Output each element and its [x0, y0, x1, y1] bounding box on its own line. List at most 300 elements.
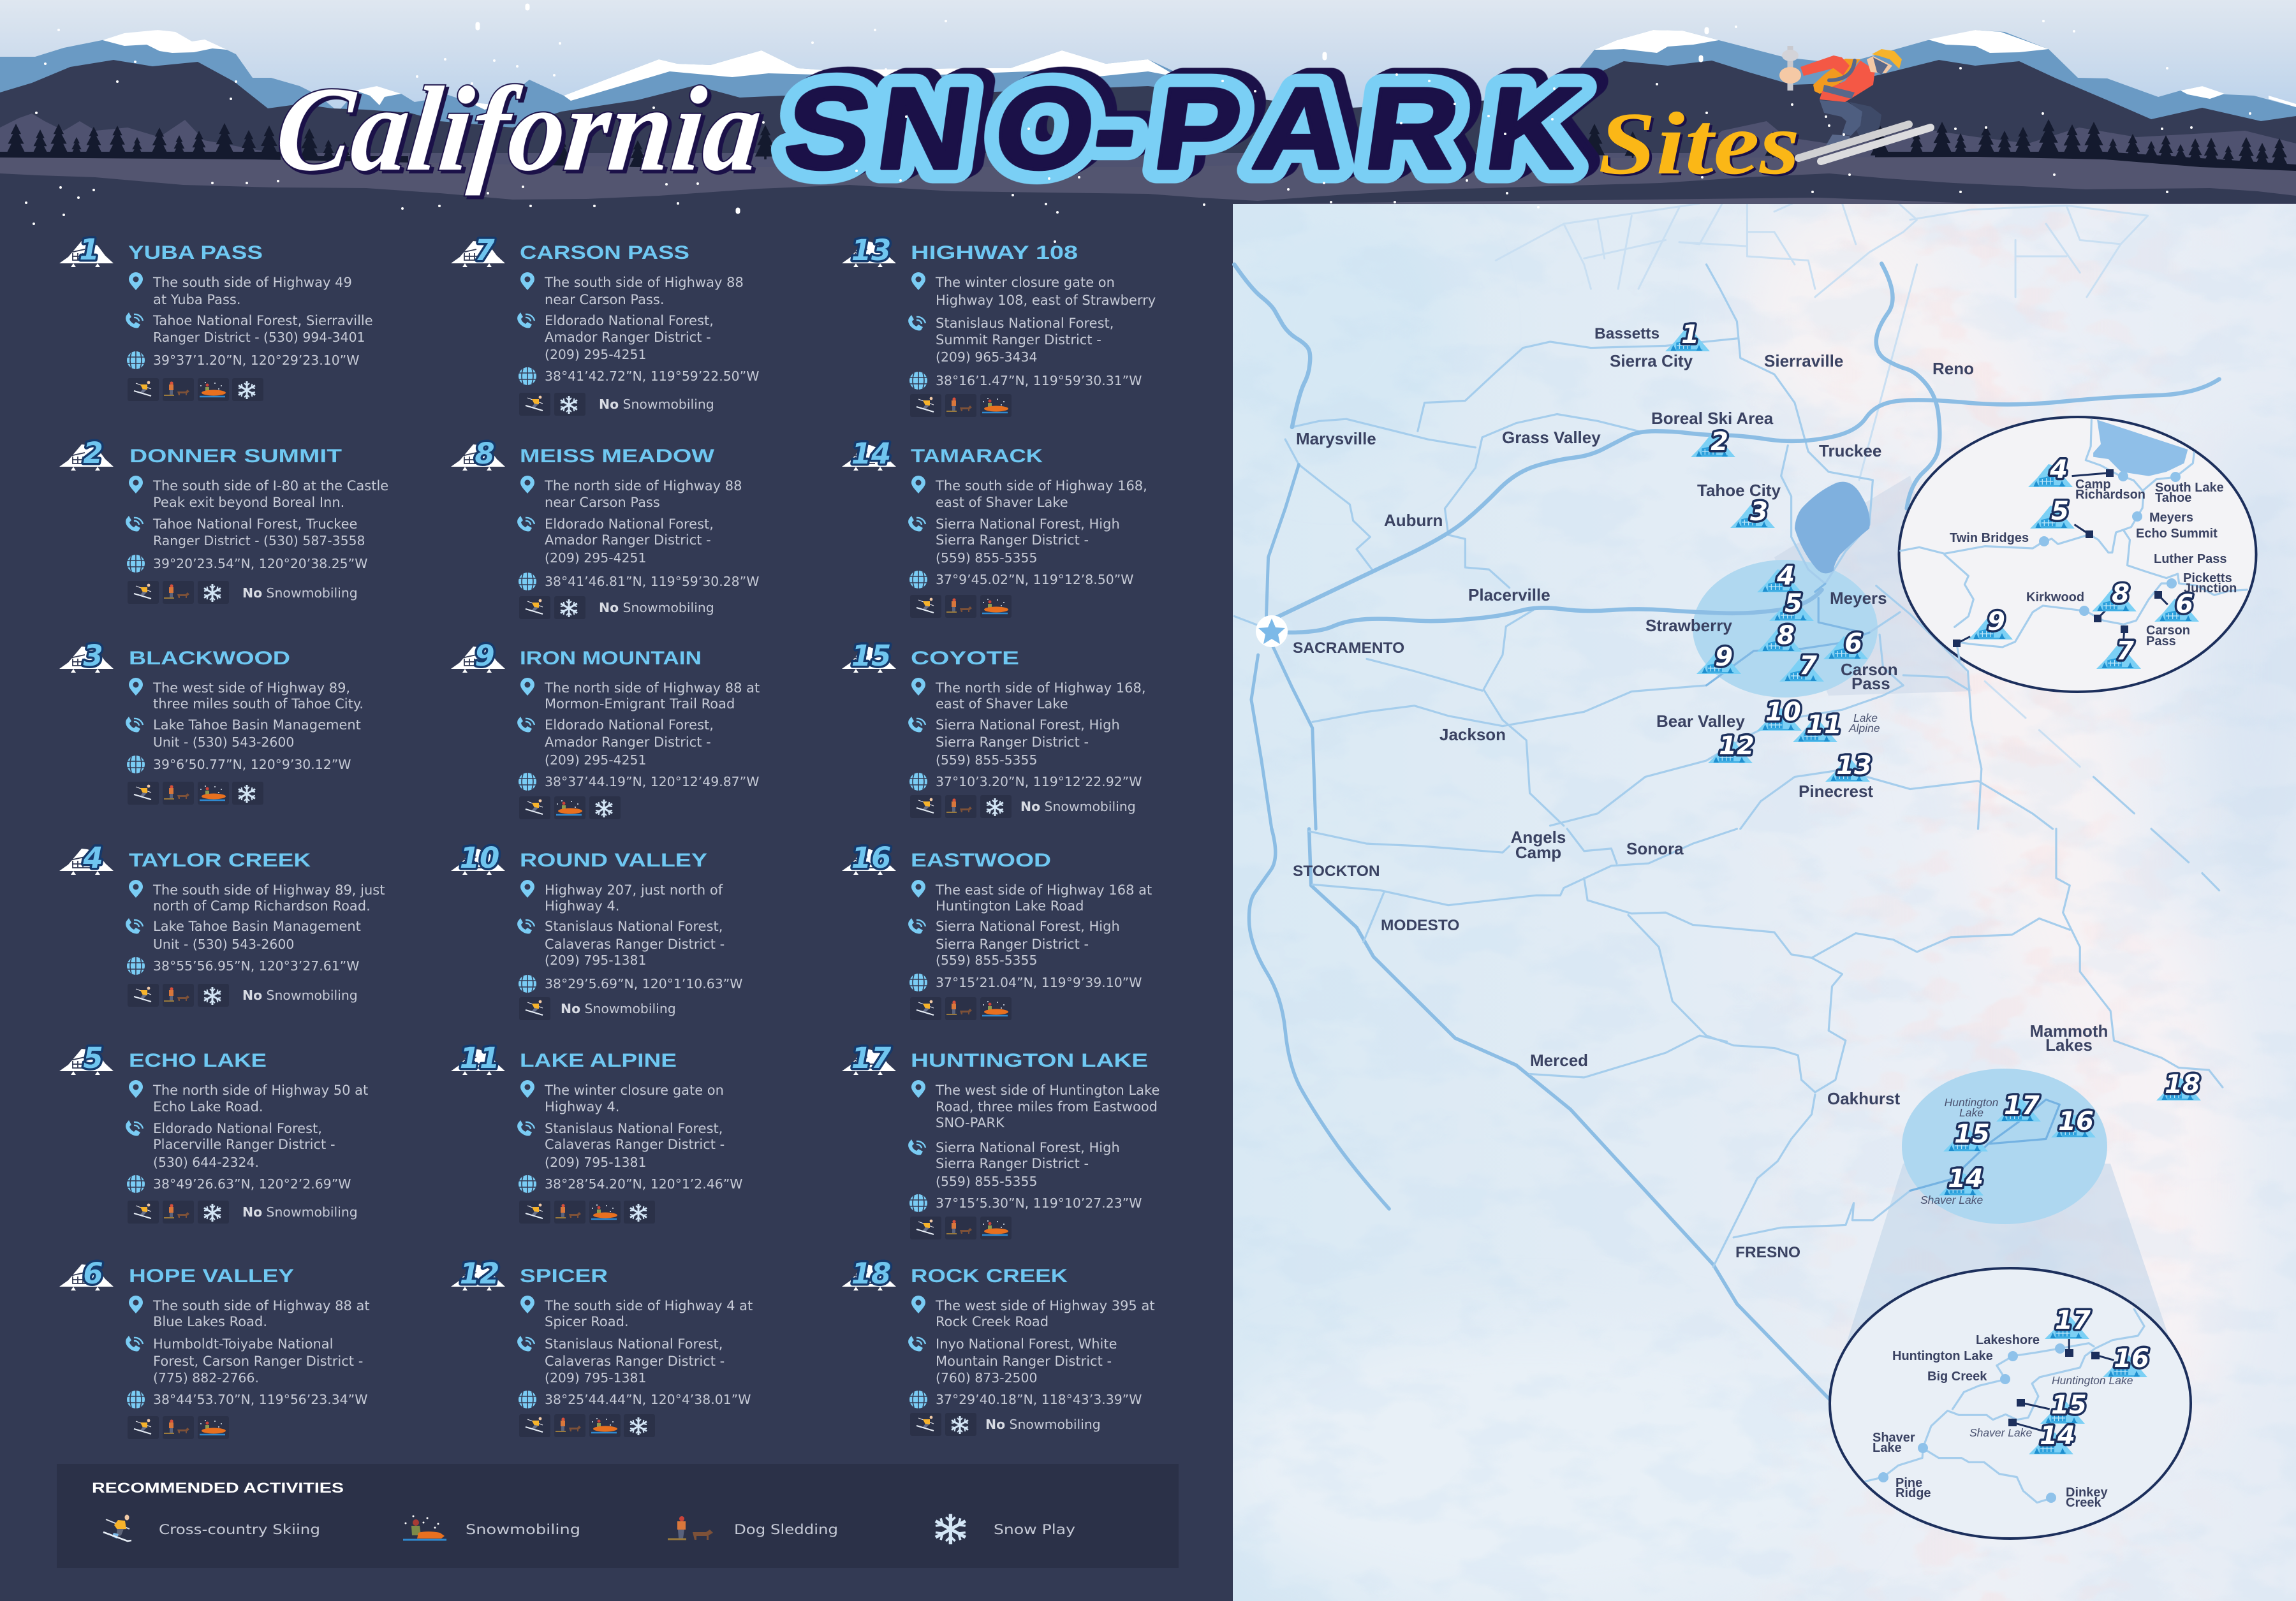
address: east of Shaver Lake	[936, 495, 1068, 510]
road network north	[1234, 264, 2219, 829]
contact	[126, 1120, 335, 1170]
address	[911, 1296, 1155, 1329]
legend: snowmobiling: Snowmobiling	[466, 1522, 580, 1537]
map city labels: Pass	[1851, 674, 1890, 693]
snow caps	[103, 30, 2296, 110]
contact: Calaveras Ranger District -	[545, 937, 725, 952]
address: SNO-PARK	[936, 1115, 1005, 1130]
contact: Amador Ranger District -	[545, 330, 711, 345]
address: Rock Creek Road	[936, 1314, 1049, 1329]
contact: Eldorado National Forest,	[545, 313, 714, 328]
marker number 5: 5	[83, 1041, 103, 1075]
inset markers	[1968, 455, 2199, 669]
marker number 4	[59, 841, 114, 875]
marker number 4: 4	[82, 841, 103, 875]
map city labels: Carson	[1841, 660, 1898, 679]
activities	[519, 997, 676, 1020]
tree line	[0, 119, 2296, 173]
map city labels: Auburn	[1384, 511, 1443, 530]
marker number 9: 9	[475, 639, 495, 673]
marker number 17: 17	[851, 1041, 892, 1075]
map city labels: Lake	[1853, 712, 1878, 724]
address: The north side of Highway 88 at	[544, 680, 760, 696]
inset labels: Kirkwood	[2026, 590, 2084, 604]
contact: Stanislaus National Forest,	[545, 1121, 723, 1136]
contact: (559) 855-5355	[936, 1174, 1037, 1189]
map city labels: Boreal Ski Area	[1651, 409, 1774, 428]
contact: Calaveras Ranger District -	[545, 1354, 725, 1369]
address	[520, 678, 760, 712]
address: Highway 108, east of Strawberry	[936, 293, 1156, 308]
marker number 3	[59, 639, 114, 673]
contact: Lake Tahoe Basin Management	[153, 717, 361, 733]
site name: HOPE VALLEY	[129, 1266, 294, 1287]
map city labels: Lakes	[2045, 1035, 2093, 1055]
contact: Stanislaus National Forest,	[545, 919, 723, 934]
site 14: Tamarack	[842, 437, 1147, 618]
map city labels: Truckee	[1819, 441, 1881, 460]
activities	[519, 1414, 655, 1437]
road network south	[1249, 829, 2223, 1400]
inset labels	[1950, 478, 2237, 648]
contact	[908, 1139, 1120, 1189]
contact: Unit - (530) 543-2600	[153, 735, 294, 750]
contact: Eldorado National Forest,	[545, 717, 714, 733]
contact: (760) 873-2500	[936, 1370, 1037, 1385]
map terrain mottling	[1774, 224, 2208, 1601]
contact: Tahoe National Forest, Sierraville	[152, 313, 373, 328]
marker number 1: 1	[79, 233, 99, 267]
map city labels: Bear Valley	[1656, 712, 1745, 731]
site 17: Huntington Lake	[842, 1041, 1159, 1239]
activities	[128, 1201, 358, 1224]
site name: EASTWOOD	[911, 850, 1051, 871]
coordinates: 37°15’21.04”N, 119°9’39.10”W	[936, 975, 1142, 990]
contact: Sierra Ranger District -	[936, 735, 1089, 750]
inset labels: Camp	[2075, 478, 2111, 492]
contact: Sierra National Forest, High	[936, 1140, 1120, 1155]
marker number 8: 8	[475, 437, 495, 471]
address	[911, 272, 1156, 308]
contact: (209) 795-1381	[545, 1155, 646, 1170]
contact: (209) 295-4251	[545, 347, 646, 362]
activities: No Snowmobiling	[599, 397, 714, 412]
map city labels: Alpine	[1848, 722, 1880, 735]
contact: Forest, Carson Ranger District -	[153, 1354, 363, 1369]
map city labels: STOCKTON	[1293, 863, 1380, 880]
site name: HUNTINGTON LAKE	[911, 1050, 1148, 1071]
address: at Yuba Pass.	[153, 292, 241, 307]
inset labels: Twin Bridges	[1950, 531, 2029, 545]
contact: Sierra National Forest, High	[936, 717, 1120, 733]
marker number 18: 18	[851, 1257, 891, 1290]
back mountain range	[0, 30, 2296, 172]
inset labels: Shaver	[1873, 1431, 1915, 1445]
contact: Sierra Ranger District -	[936, 1156, 1089, 1171]
activities	[910, 1413, 1101, 1436]
contact: Sierra National Forest, High	[936, 919, 1120, 934]
activities	[519, 596, 714, 619]
title: Sites: Sites	[1598, 94, 1800, 193]
activities: No Snowmobiling	[1020, 799, 1136, 814]
contact: Sierra Ranger District -	[936, 937, 1089, 952]
activities	[128, 1416, 229, 1439]
inset labels: Tahoe	[2155, 491, 2191, 505]
site name: IRON MOUNTAIN	[520, 648, 702, 669]
map city labels: Marysville	[1296, 429, 1376, 448]
contact: Ranger District - (530) 587-3558	[153, 533, 365, 548]
contact: Eldorado National Forest,	[545, 516, 714, 532]
map city labels: Tahoe City	[1697, 481, 1781, 500]
marker number 13: 13	[851, 233, 891, 267]
inset labels: Richardson	[2075, 488, 2145, 502]
inset markers: 15	[2051, 1391, 2087, 1420]
foreground dark band	[0, 173, 2296, 204]
address: The west side of Huntington Lake	[935, 1083, 1159, 1098]
activities	[910, 394, 1012, 417]
map city labels	[1293, 325, 2108, 1261]
site name: ROCK CREEK	[911, 1266, 1068, 1287]
contact: Ranger District - (530) 994-3401	[153, 330, 365, 345]
map city labels: Jackson	[1439, 725, 1506, 744]
map city labels: Oakhurst	[1827, 1089, 1900, 1108]
inset site squares	[1953, 469, 2162, 647]
site 13: Highway 108	[842, 233, 1156, 417]
coordinates: 39°6’50.77”N, 120°9’30.12”W	[153, 757, 351, 772]
inset markers: 17	[2055, 1306, 2091, 1335]
activities: No Snowmobiling	[985, 1417, 1101, 1432]
site 4: Taylor Creek	[59, 841, 385, 1007]
inset markers: 8	[2112, 580, 2130, 609]
site 8: Meiss Meadow	[451, 437, 759, 619]
marker number 12: 12	[460, 1257, 499, 1290]
site 15: Coyote	[842, 639, 1146, 818]
contact: Unit - (530) 543-2600	[153, 937, 294, 952]
activities	[128, 782, 263, 805]
contact	[517, 1120, 725, 1170]
address: Highway 4.	[545, 1099, 619, 1115]
legend: cross-country skiing: Cross-country Skiing	[159, 1522, 320, 1537]
front dark mountain range	[0, 60, 2296, 179]
address: The south side of Highway 88 at	[152, 1298, 370, 1313]
map city labels: Grass Valley	[1502, 428, 1601, 447]
site 18: Rock Creek	[842, 1257, 1155, 1436]
activities	[910, 997, 1012, 1020]
address: Huntington Lake Road	[936, 898, 1084, 914]
map city labels: Lake	[1959, 1106, 1983, 1119]
inset map: Huntington detail	[1830, 1268, 2191, 1539]
contact: (209) 965-3434	[936, 349, 1037, 365]
address: The east side of Highway 168 at	[935, 882, 1152, 898]
map markers: 4	[1776, 562, 1795, 591]
map markers: 1	[1681, 320, 1699, 349]
contact	[908, 918, 1120, 968]
title: SNO-PARK: SNO-PARK	[777, 64, 1588, 193]
contact: (775) 882-2766.	[153, 1370, 259, 1385]
site 2: Donner Summit	[59, 436, 388, 604]
legend: recommended activities	[57, 1464, 1179, 1568]
coordinates: 38°28’54.20”N, 120°1’2.46”W	[545, 1176, 742, 1192]
inset labels: Echo Summit	[2136, 527, 2218, 541]
address	[520, 272, 744, 307]
address: Road, three miles from Eastwood	[936, 1099, 1158, 1115]
contact	[517, 918, 725, 968]
marker number 5	[59, 1041, 114, 1075]
site listings	[59, 233, 1159, 1439]
inset labels: Lake	[1873, 1441, 1902, 1455]
coordinates: 39°37’1.20”N, 120°29’23.10”W	[153, 353, 359, 368]
contact	[908, 1336, 1117, 1385]
contact: Sierra National Forest, High	[936, 516, 1120, 532]
contact	[908, 717, 1120, 768]
marker number 6: 6	[83, 1257, 103, 1290]
contact: Lake Tahoe Basin Management	[153, 919, 361, 934]
activities: No Snowmobiling	[561, 1001, 676, 1016]
inset stop dots	[1878, 1343, 2065, 1503]
map markers: 9	[1715, 643, 1733, 672]
contact	[126, 312, 373, 345]
address: The south side of Highway 4 at	[544, 1298, 753, 1313]
address	[911, 880, 1152, 914]
site 16: Eastwood	[842, 841, 1152, 1020]
map markers: 5	[1785, 589, 1802, 618]
inset markers: 6	[2175, 590, 2193, 619]
map city labels: MODESTO	[1381, 917, 1459, 934]
coordinates: 38°16’1.47”N, 119°59’30.31”W	[936, 373, 1142, 388]
inset labels: South Lake	[2155, 481, 2224, 495]
site 3: Blackwood	[59, 639, 364, 805]
coordinates: 38°25’44.44”N, 120°4’38.01”W	[545, 1392, 751, 1407]
inset labels: Ridge	[1895, 1486, 1931, 1500]
coordinates: 38°41’42.72”N, 119°59’22.50”W	[545, 369, 759, 384]
mid-ground snowfield	[0, 157, 2296, 204]
contact: (209) 295-4251	[545, 752, 646, 768]
contact: Eldorado National Forest,	[153, 1121, 322, 1136]
inset labels: Huntington Lake	[2052, 1374, 2133, 1387]
title: California: California	[270, 62, 768, 196]
marker number 2	[59, 436, 114, 471]
address	[129, 678, 364, 712]
marker number 14: 14	[851, 437, 891, 471]
map city labels: Huntington	[1945, 1096, 1998, 1109]
inset labels: Big Creek	[1927, 1370, 1987, 1384]
activities: No Snowmobiling	[599, 600, 714, 615]
site name: COYOTE	[911, 648, 1019, 669]
marker number 10: 10	[460, 841, 499, 875]
address	[129, 272, 352, 307]
activities	[128, 984, 358, 1007]
coordinates: 38°44’53.70”N, 119°56’23.34”W	[153, 1392, 367, 1407]
map city labels: Placerville	[1468, 585, 1550, 604]
inset labels: Shaver Lake	[1969, 1426, 2033, 1439]
contact	[517, 516, 714, 566]
map panel	[1212, 191, 2296, 1601]
address: The south side of Highway 89, just	[152, 882, 385, 898]
coordinates: 37°9’45.02”N, 119°12’8.50”W	[936, 572, 1133, 587]
contact: Humboldt-Toiyabe National	[153, 1336, 333, 1352]
address: The north side of Highway 168,	[935, 680, 1146, 696]
legend: dog sledding	[668, 1516, 838, 1540]
address: The north side of Highway 88	[544, 478, 742, 493]
misty hills behind trees	[0, 113, 2296, 179]
address: near Carson Pass.	[545, 292, 665, 307]
contact	[126, 516, 365, 548]
contact: Mountain Ranger District -	[936, 1354, 1112, 1369]
marker number 2: 2	[83, 436, 103, 470]
inset labels: Junction	[2184, 581, 2237, 596]
activities	[910, 595, 1012, 618]
address	[911, 1080, 1159, 1130]
inset labels: Lakeshore	[1976, 1333, 2040, 1347]
site 12: Spicer	[451, 1257, 753, 1437]
address: Highway 4.	[545, 898, 619, 914]
marker number 8	[451, 437, 505, 471]
coordinates: 38°37’44.19”N, 120°12’49.87”W	[545, 774, 759, 789]
contact: (559) 855-5355	[936, 550, 1037, 566]
contact	[908, 315, 1114, 365]
map city labels: Mammoth	[2030, 1021, 2108, 1041]
address: Echo Lake Road.	[153, 1099, 263, 1115]
map markers: 17	[2004, 1091, 2040, 1120]
inset labels	[1873, 1333, 2133, 1510]
site name: ECHO LAKE	[129, 1050, 267, 1071]
legend: dog sledding: Dog Sledding	[734, 1522, 838, 1537]
coordinates: 37°15’5.30”N, 119°10’27.23”W	[936, 1195, 1142, 1211]
site 10: Round Valley	[451, 841, 742, 1020]
inset labels: Dinkey	[2066, 1486, 2108, 1500]
contact: Placerville Ranger District -	[153, 1137, 335, 1152]
inset markers: 7	[2116, 636, 2134, 666]
contact: (209) 795-1381	[545, 953, 646, 968]
site name: ROUND VALLEY	[520, 850, 707, 871]
marker number 7: 7	[475, 233, 495, 267]
site name: MEISS MEADOW	[520, 446, 715, 467]
marker number 3: 3	[83, 639, 103, 673]
address: The west side of Highway 89,	[152, 680, 350, 696]
marker number 15: 15	[851, 639, 891, 673]
address: Blue Lakes Road.	[153, 1314, 267, 1329]
address: The south side of Highway 168,	[935, 478, 1147, 493]
activities	[128, 378, 263, 401]
map city labels: SACRAMENTO	[1293, 640, 1404, 657]
address: north of Camp Richardson Road.	[153, 898, 371, 914]
site 9: Iron Mountain	[451, 639, 760, 819]
contact: (559) 855-5355	[936, 953, 1037, 968]
contact: Summit Ranger District -	[936, 332, 1101, 347]
activities	[519, 393, 714, 416]
map markers: 18	[2165, 1070, 2200, 1099]
marker number 1	[59, 233, 114, 267]
contact: Stanislaus National Forest,	[936, 316, 1114, 331]
map city labels: Pinecrest	[1799, 782, 1873, 801]
map city labels: Sierra City	[1610, 351, 1693, 370]
address	[520, 1296, 753, 1329]
map city labels: Shaver Lake	[1920, 1194, 1983, 1206]
contact: Sierra Ranger District -	[936, 532, 1089, 548]
inset labels: Meyers	[2149, 511, 2193, 525]
activities	[910, 795, 1136, 818]
legend: snow play: Snow Play	[994, 1522, 1075, 1537]
contact: Tahoe National Forest, Truckee	[152, 516, 357, 532]
coordinates: 38°41’46.81”N, 119°59’30.28”W	[545, 574, 759, 589]
map markers: 3	[1750, 497, 1768, 527]
marker number 9	[451, 639, 505, 673]
site name: CARSON PASS	[520, 242, 689, 263]
site name: TAYLOR CREEK	[129, 850, 311, 871]
map city labels: Camp	[1515, 843, 1561, 862]
map markers: 11	[1806, 710, 1842, 740]
address: Spicer Road.	[545, 1314, 629, 1329]
map markers: 10	[1765, 698, 1801, 727]
Lake Tahoe	[1795, 482, 1870, 573]
site 1: Yuba Pass	[59, 233, 373, 401]
header illustration	[0, 0, 2296, 242]
inset markers: 4	[2049, 455, 2068, 485]
contact: Calaveras Ranger District -	[545, 1137, 725, 1152]
inset labels: Pass	[2146, 634, 2176, 648]
map markers: 15	[1954, 1120, 1990, 1149]
address	[520, 880, 723, 914]
inset markers: 9	[1987, 607, 2005, 636]
illustration: skier	[1779, 46, 1931, 161]
address: Peak exit beyond Boreal Inn.	[153, 495, 344, 510]
highlight circle and zoom cone: Huntington area	[1846, 1069, 2172, 1345]
address: east of Shaver Lake	[936, 696, 1068, 712]
address	[129, 476, 388, 510]
map markers: 6	[1844, 629, 1862, 658]
address	[129, 1296, 370, 1329]
inset site squares	[2008, 1349, 2100, 1426]
map markers: 7	[1799, 651, 1817, 680]
address	[129, 1080, 368, 1115]
map markers: 13	[1836, 751, 1872, 780]
map city labels: Meyers	[1830, 588, 1887, 608]
map markers: 8	[1777, 621, 1795, 650]
contact	[517, 717, 714, 768]
site name: HIGHWAY 108	[911, 242, 1078, 263]
contact: Stanislaus National Forest,	[545, 1336, 723, 1352]
activities	[519, 796, 621, 819]
inset map: Tahoe detail	[1899, 417, 2256, 692]
contact: (559) 855-5355	[936, 752, 1037, 768]
falling snow	[26, 6, 2250, 242]
inset labels: Picketts	[2183, 571, 2232, 585]
map city labels: Merced	[1530, 1051, 1588, 1070]
icon: Sacramento star	[1256, 615, 1288, 647]
site 11: Lake Alpine	[451, 1041, 742, 1224]
inset markers: 16	[2114, 1344, 2149, 1373]
inset markers: 14	[2040, 1421, 2075, 1451]
map city labels: Angels	[1511, 828, 1566, 847]
contact: (530) 644-2324.	[153, 1155, 259, 1170]
map city labels: Sierraville	[1764, 351, 1843, 370]
site 6: Hope Valley	[59, 1257, 370, 1439]
coordinates: 38°49’26.63”N, 120°2’2.69”W	[153, 1176, 351, 1192]
activities: No Snowmobiling	[242, 988, 358, 1003]
address: Highway 207, just north of	[545, 882, 723, 898]
address: The south side of I-80 at the Castle	[152, 478, 388, 493]
marker number 7	[451, 233, 505, 267]
site name: TAMARACK	[911, 446, 1043, 467]
coordinates: 37°29’40.18”N, 118°43’3.39”W	[936, 1392, 1142, 1407]
site 7: Carson Pass	[451, 233, 759, 416]
map markers: 12	[1719, 731, 1755, 761]
inset labels: Luther Pass	[2154, 552, 2226, 566]
contact	[126, 1336, 363, 1385]
inset markers: 5	[2051, 497, 2069, 526]
map markers: 14	[1948, 1164, 1983, 1194]
address	[520, 476, 742, 510]
